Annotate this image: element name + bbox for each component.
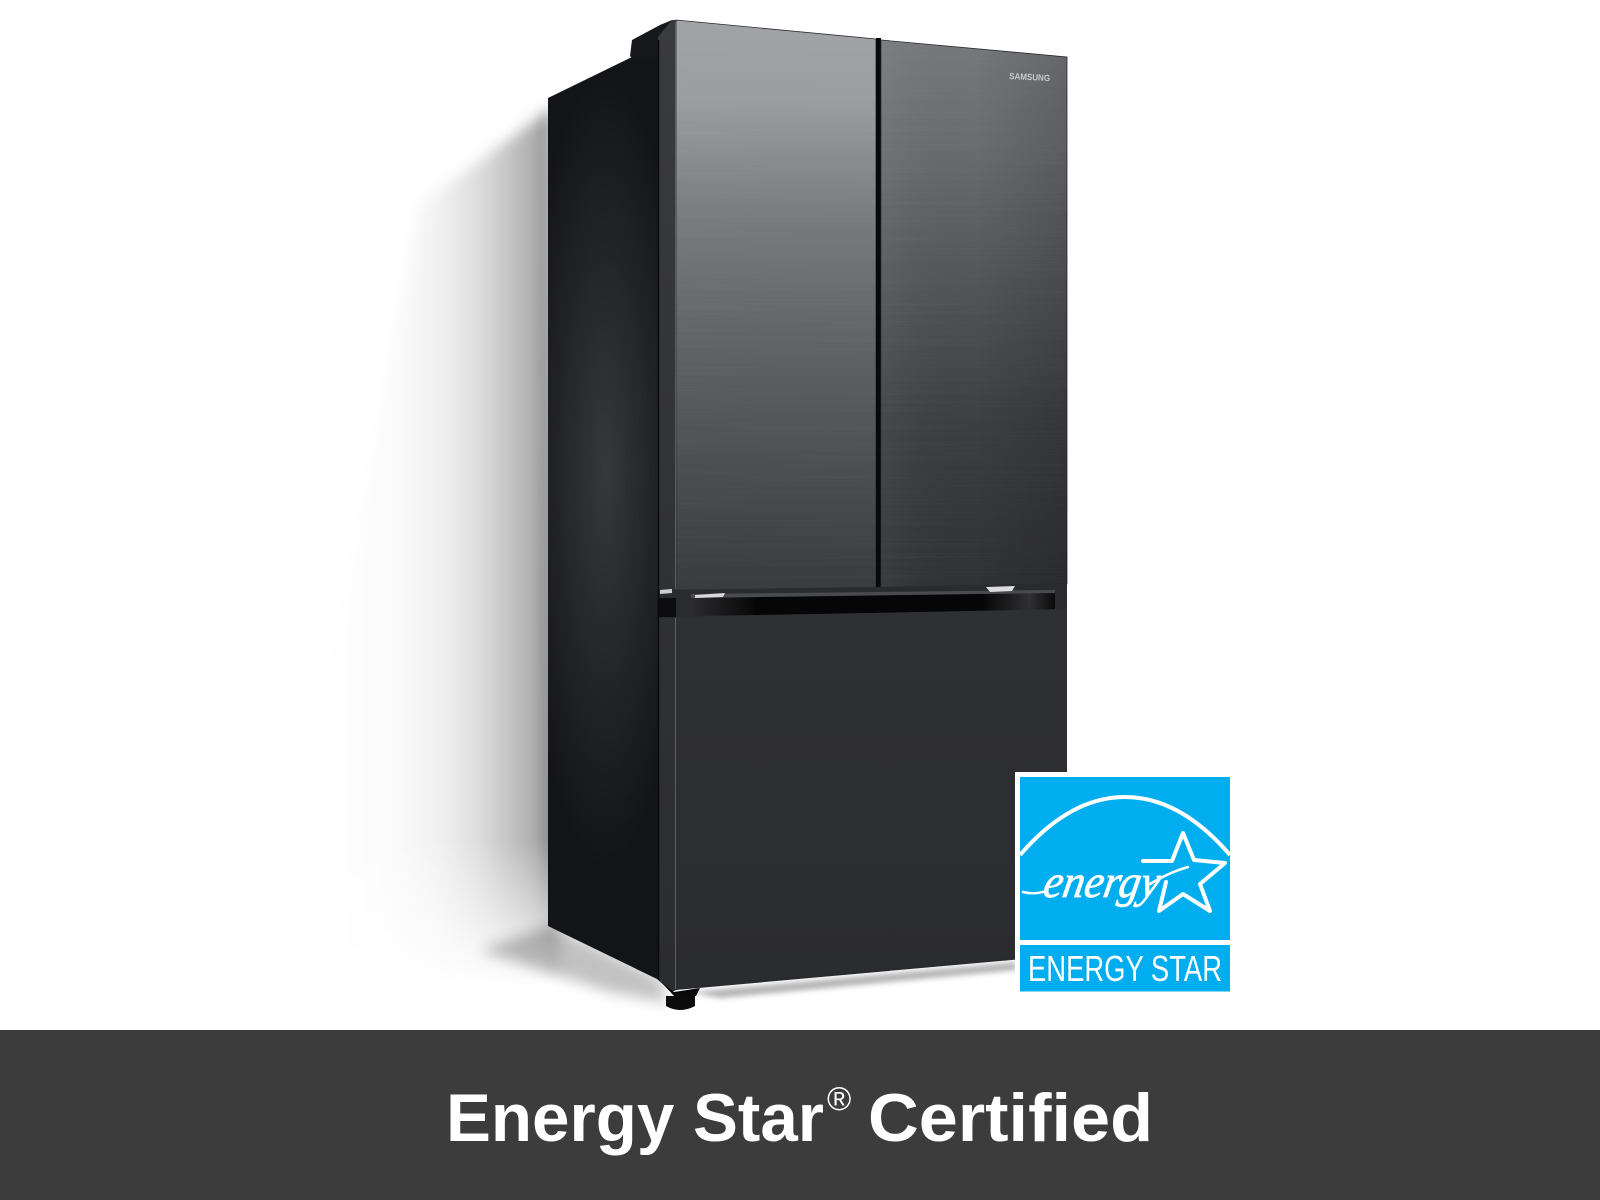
energy script wordmark: energy [1040,857,1165,908]
energy star outline [1143,833,1225,911]
wall shadow [300,108,668,1003]
bottom band [0,1030,1600,1200]
title [446,1080,1153,1156]
door gap [876,38,881,588]
badge arc [1020,797,1230,855]
badge label: ENERGY STAR [1028,948,1222,989]
title: Energy Star [446,1080,824,1156]
script swash [1023,867,1188,893]
badge white frame [1015,772,1230,996]
front edge strip [658,20,676,992]
badge upper panel [1020,777,1230,940]
energy star badge [1015,772,1230,996]
strip highlights [674,22,676,989]
right door [881,40,1067,587]
title: ® [827,1080,851,1117]
samsung wordmark: SAMSUNG [1009,71,1050,83]
drawer gap [658,584,1067,618]
badge lower panel [1020,945,1230,992]
title: Certified [868,1080,1153,1156]
left door [676,20,876,590]
brushed metal texture [676,20,1068,590]
side panel [548,50,659,980]
top hinge cover [630,20,676,60]
freezer drawer [676,609,1067,990]
refrigerator [548,20,1068,1010]
floor shadow under freezer [690,962,1016,998]
adjustable foot [661,982,700,1010]
